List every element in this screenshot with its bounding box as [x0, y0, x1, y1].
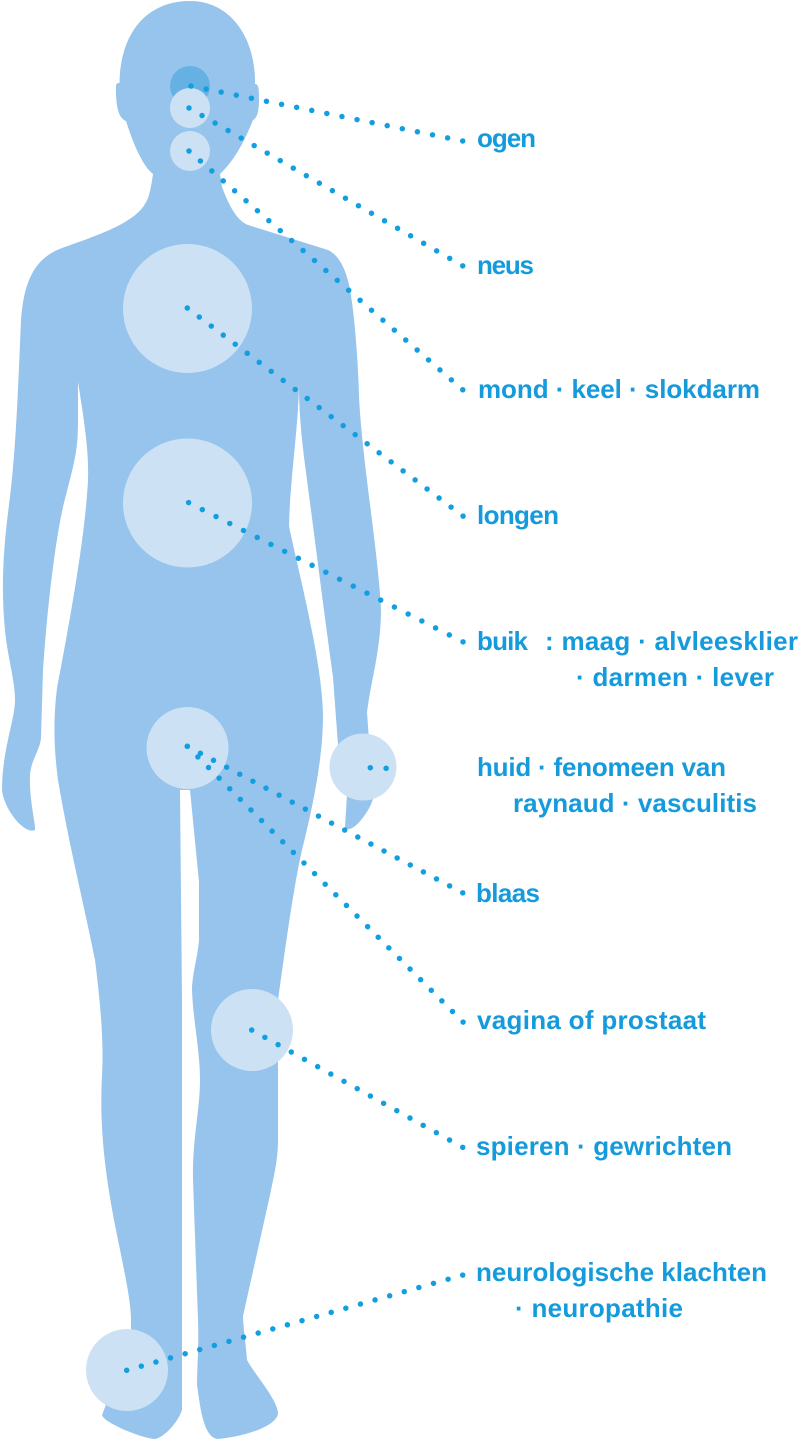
label: ogen: ogen [477, 123, 536, 153]
label: mond keel slokdarm: mond · keel · slokdarm [478, 374, 760, 404]
circle: skin at hand [330, 734, 396, 800]
circle: bladder and pelvis [146, 707, 228, 789]
circle: eyes [170, 66, 210, 106]
circle: mouth and throat [170, 131, 210, 171]
dotted line: mond keel slokdarm [189, 151, 463, 390]
circle: lungs [123, 244, 252, 373]
label: neurologische klachten: · neuropathie [515, 1293, 683, 1323]
circle: nose [170, 88, 210, 128]
label: buik: · darmen · lever [576, 662, 774, 692]
circle: nerves at foot [86, 1329, 168, 1411]
dotted line: ogen [191, 86, 463, 141]
label: longen: longen [477, 500, 559, 530]
dotted line: spieren gewrichten [252, 1030, 463, 1148]
label: neurologische klachten: neurologische klachten [476, 1257, 767, 1287]
circle: abdomen [123, 438, 252, 568]
label: vagina of prostaat: vagina of prostaat [477, 1005, 706, 1035]
label: neus: neus [477, 250, 534, 280]
label: buik [477, 626, 798, 692]
label: huid: raynaud · vasculitis [513, 788, 757, 818]
label: huid [477, 752, 757, 818]
label: spieren gewrichten: spieren · gewrichten [476, 1131, 732, 1161]
dotted line: buik [189, 503, 463, 642]
label: buik: : maag · alvleesklier [545, 626, 798, 656]
dotted line: blaas [187, 746, 463, 893]
body silhouette [2, 1, 381, 1439]
label: buik: buik [477, 626, 529, 656]
circle: muscles and joints at knee [211, 989, 293, 1071]
dotted line: neus [189, 108, 463, 266]
dotted line: vagina of prostaat [187, 746, 463, 1022]
label: huid: huid · fenomeen van [477, 752, 726, 782]
label: neurologische klachten [476, 1257, 767, 1323]
label: blaas: blaas [476, 878, 540, 908]
dotted line: huid [370, 765, 386, 771]
dotted line: longen [187, 308, 463, 516]
dotted line: neurologische klachten [127, 1275, 463, 1370]
